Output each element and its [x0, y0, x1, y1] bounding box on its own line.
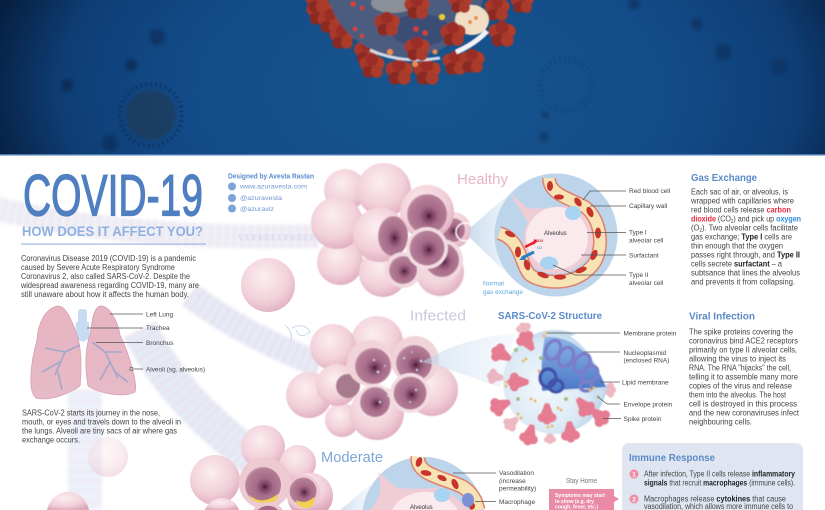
RNA coils: [542, 338, 601, 391]
viral infection text: telling it to assemble many more: [689, 373, 799, 382]
signature: [285, 325, 310, 340]
lung labels: Bronchus: [146, 340, 174, 347]
journey text: SARS-CoV-2 starts its journey in the nose,: [22, 408, 160, 418]
moderate labels: Vasodilation: [499, 470, 534, 477]
healthy alveoli cluster: [311, 163, 474, 297]
viral infection text: cell is destroyed in this process: [689, 400, 797, 409]
healthy alveolus close-up: CO2: [535, 238, 544, 243]
white cut-away: [570, 332, 612, 388]
moderate labels: [453, 470, 536, 506]
lung labels: [87, 312, 205, 374]
step 2: Macrophages release cytokines that cause: [644, 494, 787, 504]
credits: @azuraviz: [240, 206, 274, 213]
viral infection text: primarily on type II alveolar cells,: [689, 345, 797, 354]
virus labels: [548, 330, 677, 423]
virus labels: Spike protein: [624, 416, 662, 423]
gas exchange text: subtsance that lines the alveolus: [691, 269, 800, 278]
viral infection text: [689, 310, 800, 427]
bronchial tubes (faint background): [0, 205, 320, 510]
symptoms callout: to show (e.g. dry: [555, 499, 595, 505]
red blood cells: [414, 456, 475, 510]
moderate labels: (increase: [499, 478, 526, 485]
healthy labels: [553, 188, 671, 287]
moderate alveolus close-up: [340, 456, 484, 510]
gas exchange text: dioxide (CO: [691, 215, 733, 224]
virus particles: [373, 351, 422, 403]
infected alveoli cluster: [286, 316, 458, 440]
healthy alveolus close-up: Alveolus: [544, 231, 567, 237]
step 1: [630, 470, 795, 487]
intro text: still unaware about how it affects the human body.: [21, 290, 189, 299]
symptoms callout: [549, 489, 619, 510]
journey text: mouth, or eyes and travels down to the alveoli in: [22, 418, 181, 426]
gas exchange text: 2: [699, 228, 702, 234]
viral infection text: RNA. The RNA "hijacks" the cell,: [689, 363, 791, 372]
gas exchange text: [690, 172, 801, 287]
step 1: 1: [632, 472, 636, 478]
gas exchange text: and prevents it from collapsing.: [691, 278, 795, 287]
intro text: Coronavirus 2, also called SARS-CoV-2. Despite the: [21, 272, 190, 281]
gas exchange text: ) and pick up: [733, 215, 776, 224]
spikes: [487, 327, 614, 448]
banner with coronavirus image: [0, 0, 825, 156]
cone to virus: [422, 333, 516, 388]
cut-out core: [541, 337, 606, 391]
viral infection text: copies of the virus and release: [689, 382, 793, 391]
normal gas exchange caption: [483, 280, 523, 296]
intro text: [20, 254, 199, 299]
gas exchange text: Each sac of air, or alveolus, is: [691, 187, 788, 196]
healthy labels: alveolar cell: [629, 238, 664, 244]
panel: immune response: Immune Response: [629, 452, 715, 464]
journey text: the lungs. Alveoli are tiny sacs of air where gas: [22, 426, 177, 436]
virus labels: Envelope protein: [624, 402, 673, 408]
title: [21, 164, 206, 245]
gas exchange text: gas exchange; Type I cells are: [691, 233, 793, 242]
subtitle: HOW DOES IT AFFECT YOU?: [22, 223, 203, 239]
moderate alveoli cluster: [190, 425, 333, 510]
panel: immune response: [622, 443, 803, 510]
proteins: [504, 332, 596, 428]
credits: www.azuravesta.com: [239, 184, 307, 190]
credits: @azuravesta: [240, 195, 282, 202]
healthy labels: Type II: [629, 272, 649, 279]
lungs diagram: [31, 306, 205, 399]
healthy labels: Capillary wall: [629, 203, 668, 210]
gas exchange text: ). Two alveolar cells facilitate: [702, 224, 799, 233]
step 1: signals that recruit macrophages (immune cells).: [644, 478, 795, 487]
normal gas exchange caption: gas exchange: [483, 289, 523, 296]
viral infection text: and the new coronaviruses infect: [689, 409, 800, 418]
journey text: [22, 408, 181, 444]
intro text: widespread awareness regarding COVID-19, many are: [20, 281, 199, 290]
gas exchange text: (O: [691, 224, 700, 233]
viral infection text: The spike proteins covering the: [689, 327, 794, 336]
virus labels: Lipid membrane: [622, 380, 669, 386]
virus structure illustration: [486, 320, 616, 448]
credits: Designed by Avesta Rastan: [228, 174, 314, 180]
viral infection text: neighbouring cells.: [689, 418, 752, 427]
gas exchange text: Gas Exchange: [691, 172, 757, 184]
cells: [462, 493, 474, 507]
type II cells: [540, 206, 581, 270]
gas exchange text: 2: [731, 219, 734, 225]
SARS-CoV-2 heading: SARS-CoV-2 Structure: [498, 310, 602, 322]
viral infection text: allowing the virus to inject its: [689, 354, 786, 363]
virus labels: Membrane protein: [624, 330, 677, 338]
intro text: caused by Severe Acute Respiratory Syndrome: [21, 263, 175, 272]
lung labels: Trachea: [146, 325, 170, 332]
gas exchange text: cells secrete surfactant – a: [691, 260, 783, 269]
red blood cells: [504, 181, 601, 280]
healthy alveolus close-up: O2: [537, 245, 543, 250]
step 2: [630, 494, 793, 510]
healthy label: Healthy: [457, 171, 509, 188]
faint spheres behind text: [47, 235, 318, 510]
step 1: After infection, Type II cells release inflammatory: [644, 470, 795, 479]
gas exchange text: passes right through, and Type II: [691, 251, 800, 260]
lung labels: Left Lung: [146, 312, 173, 318]
moderate labels: permeability): [499, 486, 536, 492]
faint background viruses: [61, 0, 787, 151]
virus labels: Nucleoplasmid: [624, 350, 667, 357]
gas exchange text: wrapped with capillaries where: [690, 196, 795, 205]
gas exchange text: thin enough that the oxygen: [691, 242, 783, 251]
stay home heading: Stay Home: [566, 478, 597, 485]
main coronavirus: [305, 0, 534, 85]
symptoms callout: Symptoms may start: [555, 493, 605, 499]
gas exchange text: red blood cells release carbon: [691, 206, 791, 215]
virus labels: (enclosed RNA): [624, 358, 669, 364]
infected label: Infected: [410, 308, 466, 324]
lung labels: Alveoli (sg. alveolus): [146, 366, 205, 374]
intro text: Coronavirus Disease 2019 (COVID-19) is a pandemic: [21, 254, 196, 263]
moderate label: Moderate: [321, 449, 383, 466]
viral infection text: coronavirus bind ACE2 receptors: [689, 336, 798, 345]
gas exchange text: oxygen: [776, 215, 801, 224]
viral infection text: Viral Infection: [689, 310, 755, 322]
moderate labels: Macrophage: [499, 499, 536, 506]
normal gas exchange caption: Normal: [483, 280, 505, 288]
step 2: 2: [632, 496, 636, 504]
credits: [228, 174, 314, 213]
healthy alveolus close-up: [470, 174, 618, 296]
healthy labels: Surfactant: [629, 252, 659, 260]
title: COVID-19: [23, 164, 203, 228]
healthy labels: Type I: [629, 230, 647, 236]
healthy labels: Red blood cell: [629, 188, 671, 195]
healthy labels: alveolar cell: [629, 280, 664, 287]
gas exchange arrows: [525, 242, 535, 247]
back spikes: [486, 320, 616, 444]
journey text: exchange occurs.: [22, 436, 80, 444]
viral infection text: them into the alveolus. The host: [689, 391, 787, 400]
